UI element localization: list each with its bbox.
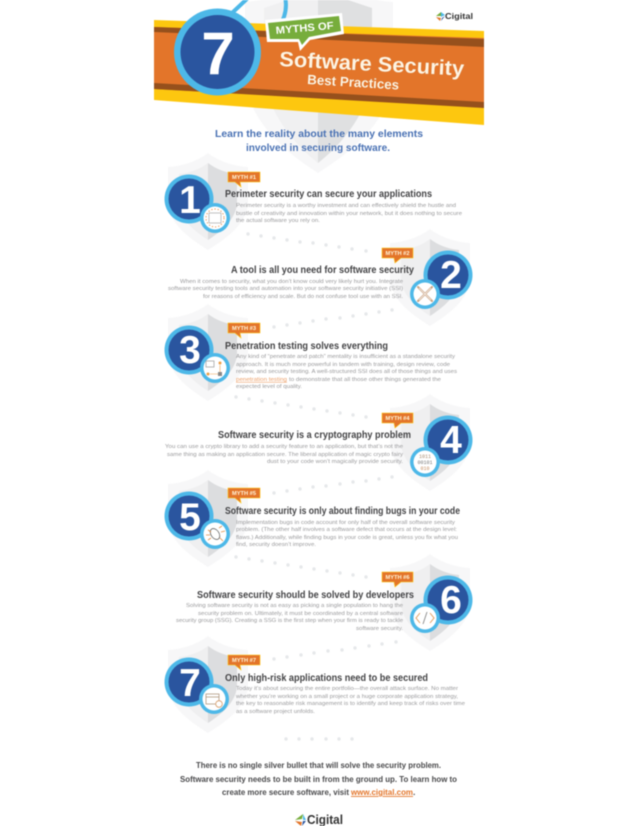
icon: network devices xyxy=(200,353,230,383)
number badge 4: 4 xyxy=(440,419,462,462)
icon: bug xyxy=(200,519,230,549)
dotted connector 5 to 6 xyxy=(234,555,368,579)
number badge 5 xyxy=(164,492,214,540)
body text 3: Any kind of “penetrate and patch” mentality is insufficient as a standalone security xyxy=(236,354,455,360)
body text 5: problem. (The other half involves a software defect that occurs at the design level: xyxy=(236,527,457,533)
background shield xyxy=(245,0,393,173)
number badge 2: 2 xyxy=(440,254,462,297)
dotted connector 2 to 3 xyxy=(272,308,394,329)
dotted connector 3 to 4 xyxy=(234,395,368,419)
body text 4: dust to your code won’t magically provide security. xyxy=(267,459,403,465)
heading 6: Software security should be solved by developers xyxy=(197,590,415,601)
myth tag 5 xyxy=(228,488,260,503)
title banner xyxy=(154,20,484,125)
myth tag 5: MYTH #5 xyxy=(232,491,256,497)
body text 1: bustle of creativity and innovation within your network, but it does nothing to secure xyxy=(236,211,462,217)
number badge 3 xyxy=(164,326,214,374)
number badge 7 xyxy=(164,658,214,706)
myth tag 1 xyxy=(228,172,260,187)
dotted connector closing xyxy=(284,737,354,741)
myth tag 1: MYTH #1 xyxy=(232,175,256,181)
body text 2: software security testing tools and automation into your software security initiative (SSI) xyxy=(168,286,403,292)
intro text: involved in securing software. xyxy=(246,142,390,154)
myth tag 7: MYTH #7 xyxy=(232,658,256,664)
icon: binary code: 1011 xyxy=(419,454,431,460)
myth tag 3 xyxy=(228,323,260,338)
myth tag 3: MYTH #3 xyxy=(232,326,256,332)
panel: myth 5 xyxy=(164,470,460,567)
myth tag 4 xyxy=(382,413,413,428)
body text 4: same thing as making an application secure. The liberal application of magic crypto fairy xyxy=(167,452,403,458)
body text 5: Implementation bugs in code account for only half of the overall software security xyxy=(236,520,455,526)
body text 1 xyxy=(236,203,462,224)
number badge 6: 6 xyxy=(440,579,462,622)
body text 7: as a software project unfolds. xyxy=(236,709,315,715)
body text 1: Perimeter security is a worthy investment and can effectively shield the hustle and xyxy=(236,203,456,209)
panel: myth 3 xyxy=(164,304,457,401)
body text 6: software security. xyxy=(356,626,403,632)
icon: crossed tools xyxy=(410,279,440,309)
closing statement: www.cigital.com xyxy=(350,787,413,797)
intro text xyxy=(215,128,423,154)
heading 4: Software security is a cryptography problem xyxy=(218,430,411,441)
body text 4 xyxy=(165,444,403,465)
closing statement: create more secure software, visit xyxy=(222,787,349,797)
body text 4: You can use a crypto library to add a security feature to an application, but that’s not the xyxy=(165,444,403,450)
icon: locked window xyxy=(199,684,229,714)
closing statement: Software security needs to be built in from the ground up. To learn how to xyxy=(180,774,457,784)
number badge 7: 7 xyxy=(179,662,201,705)
number badge 6 xyxy=(424,576,472,624)
title text: Best Practices xyxy=(307,72,400,93)
panel: myth 4 xyxy=(165,394,472,491)
icon: perimeter window xyxy=(200,203,230,233)
myth tag 2 xyxy=(382,248,413,263)
icon: code brackets xyxy=(410,603,440,633)
myth tag 6: MYTH #6 xyxy=(386,575,410,581)
body text 3: review, and security testing. A well-structured SSI does all of those things and uses xyxy=(236,369,457,375)
panel: myth 7 xyxy=(164,636,465,733)
body text 3: approach. It is much more powerful in tandem with training, design review, code xyxy=(236,362,450,368)
green speech bubble: myths of xyxy=(265,13,344,51)
heading 5: Software security is only about finding bugs in your code xyxy=(225,506,460,517)
body text 3: expected level of quality. xyxy=(236,384,302,390)
body text 3: penetration testing xyxy=(236,377,287,383)
icon: binary code xyxy=(410,447,440,477)
dotted connector 4 to 5 xyxy=(272,475,394,495)
myth tag 4: MYTH #4 xyxy=(386,416,410,422)
icon: binary code: 00101 xyxy=(417,460,433,466)
icon: binary code: 010 xyxy=(420,466,430,472)
body text 7 xyxy=(235,686,465,715)
dotted connector 1 to 2 xyxy=(246,232,368,253)
large number 7 badge: 7 xyxy=(201,20,235,87)
body text 2: for reasons of efficiency and scale. But do not confuse tool use with an SSI. xyxy=(203,294,403,300)
closing statement: . xyxy=(413,787,415,797)
number badge 3: 3 xyxy=(179,329,201,372)
heading 3: Penetration testing solves everything xyxy=(225,341,388,352)
heading 1: Perimeter security can secure your applications xyxy=(225,189,433,200)
Cigital logo top: Cigital xyxy=(445,11,473,21)
body text 1: the actual software you rely on. xyxy=(236,218,320,224)
large number 7 badge xyxy=(174,8,261,96)
panel: myth 6 xyxy=(176,554,472,651)
body text 3 xyxy=(236,354,457,390)
body text 7: whether you’re working on a small project or a huge corporate application strategy, xyxy=(235,694,458,700)
title text xyxy=(279,48,465,93)
closing statement: There is no single silver bullet that will solve the security problem. xyxy=(196,760,441,770)
number badge 5: 5 xyxy=(179,496,201,539)
body text 6 xyxy=(176,603,403,632)
intro text: Learn the reality about the many elements xyxy=(215,128,423,140)
body text 5 xyxy=(236,520,458,548)
panel: myth 2 xyxy=(168,229,472,326)
heading 2: A tool is all you need for software security xyxy=(231,265,415,276)
number badge 4 xyxy=(424,416,472,464)
panel: myth 1 xyxy=(164,153,462,250)
myth tag 6 xyxy=(382,572,413,587)
body text 2 xyxy=(168,279,403,300)
body text 2: When it comes to security, what you don’t know could very likely hurt you. Integrate xyxy=(180,279,403,285)
dotted connector 6 to 7 xyxy=(272,640,398,661)
number badge 1: 1 xyxy=(179,179,201,222)
number badge 2 xyxy=(424,250,472,300)
green speech bubble: myths of: MYTHS OF xyxy=(275,20,335,37)
blue shield outline behind the badge xyxy=(232,0,286,52)
closing statement xyxy=(180,760,457,797)
body text 6: security problem on. Ultimately, it must be coordinated by a central software xyxy=(198,611,403,617)
body text 7: Today it’s about securing the entire portfolio—the overall attack surface. No matter xyxy=(236,686,458,692)
heading 7: Only high-risk applications need to be secured xyxy=(225,673,428,684)
number badge 1 xyxy=(164,174,214,224)
myth tag 7 xyxy=(228,655,260,670)
body text 7: the key to reasonable risk management is to identify and keep track of risks over time xyxy=(236,701,465,707)
myth tag 2: MYTH #2 xyxy=(386,251,410,257)
body text 5: flaws.) Additionally, while finding bugs in your code is great, unless you fix what you xyxy=(236,535,458,541)
body text 5: find, security doesn’t improve. xyxy=(236,542,316,548)
body text 6: Solving software security is not as easy as picking a single population to hang the xyxy=(186,603,403,609)
title text: Software Security xyxy=(279,48,465,81)
body text 3: to demonstrate that all those other things generated the xyxy=(289,377,441,383)
body text 6: security group (SSG). Creating a SSG is the first step when your firm is ready to tackle xyxy=(176,618,403,624)
